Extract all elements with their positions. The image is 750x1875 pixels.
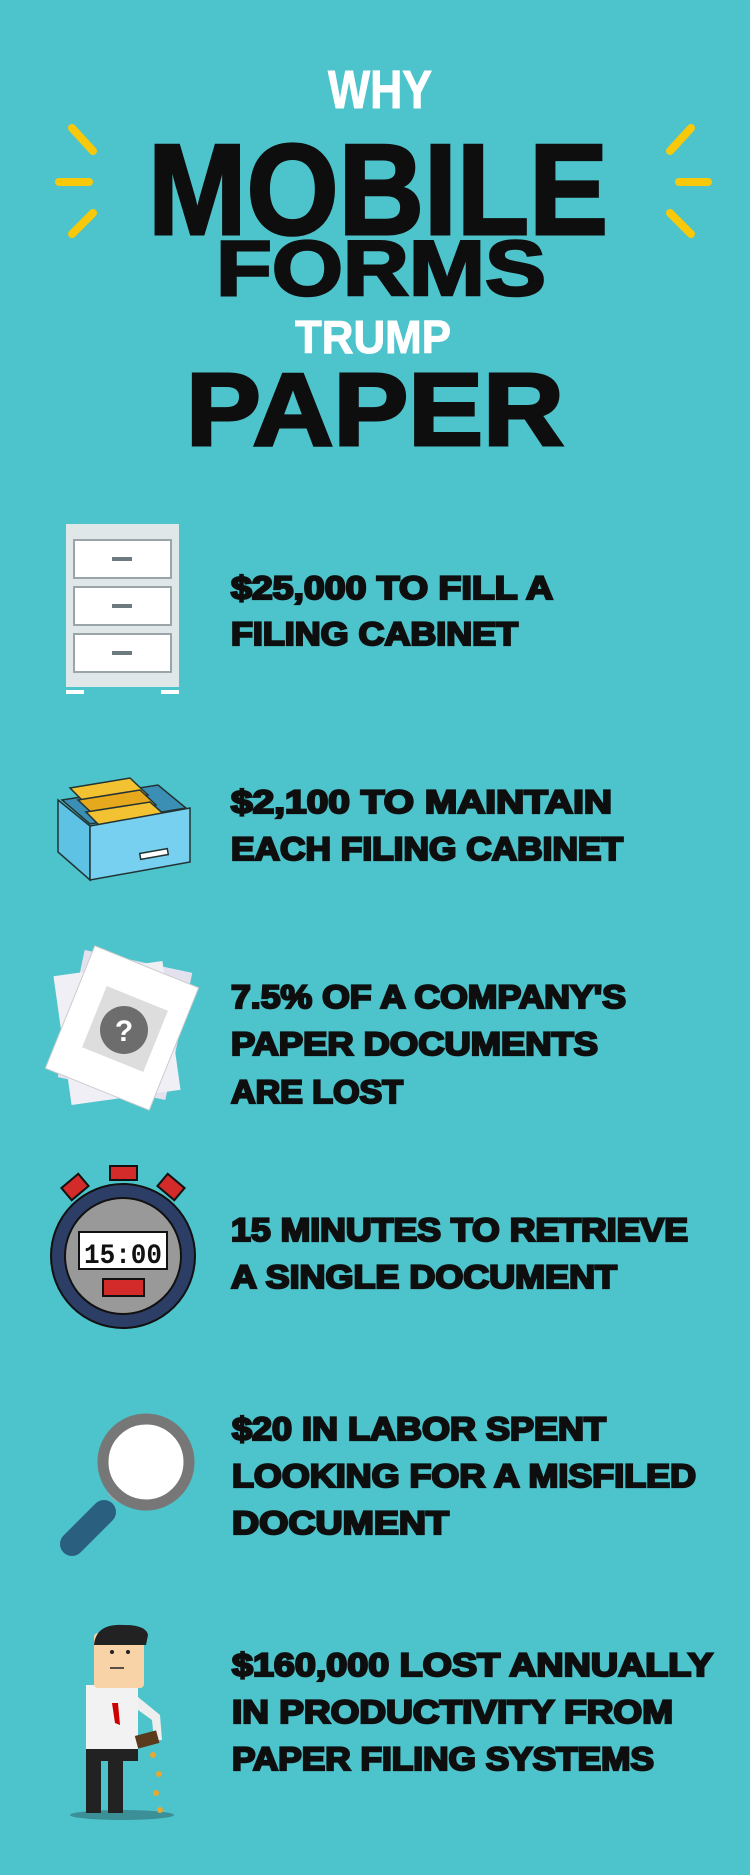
icon: stopwatch xyxy=(51,1166,195,1328)
text: retrieval time: 15 MINUTES TO RETRIEVE xyxy=(231,1212,688,1248)
text: filing cabinet cost: $25,000 TO FILL A xyxy=(231,570,553,606)
icon: yellow rays left xyxy=(59,128,93,234)
title: TRUMP xyxy=(295,311,451,363)
icon: stopwatch: 15:00 xyxy=(84,1241,162,1272)
text: lost documents xyxy=(231,979,626,1110)
text: maintain cost: $2,100 TO MAINTAIN xyxy=(231,784,612,820)
text: labor cost: LOOKING FOR A MISFILED xyxy=(232,1458,696,1494)
text: filing cabinet cost: FILING CABINET xyxy=(231,616,519,652)
text: labor cost xyxy=(232,1411,696,1541)
text: lost documents: PAPER DOCUMENTS xyxy=(231,1026,598,1062)
text: retrieval time: A SINGLE DOCUMENT xyxy=(231,1259,618,1295)
icon: filing cabinet xyxy=(66,524,179,694)
icon: lost papers xyxy=(45,946,199,1110)
icon: businessman with wallet xyxy=(70,1625,174,1820)
text: lost documents: ARE LOST xyxy=(231,1074,403,1110)
text: annual productivity loss: IN PRODUCTIVITY FROM xyxy=(232,1694,673,1730)
title: PAPER xyxy=(186,352,564,467)
text: annual productivity loss: PAPER FILING SYSTEMS xyxy=(232,1741,654,1777)
text: filing cabinet cost xyxy=(231,570,553,652)
icon: lost papers: ? xyxy=(115,1015,133,1048)
icon: magnifying glass xyxy=(72,1419,189,1544)
icon: yellow rays right xyxy=(670,128,708,234)
text: maintain cost xyxy=(231,784,623,867)
title xyxy=(148,60,608,467)
text: annual productivity loss: $160,000 LOST ANNUALLY xyxy=(232,1647,713,1683)
title: FORMS xyxy=(216,224,546,312)
title: WHY xyxy=(328,60,432,120)
text: labor cost: DOCUMENT xyxy=(232,1505,450,1541)
text: labor cost: $20 IN LABOR SPENT xyxy=(232,1411,607,1447)
text: retrieval time xyxy=(231,1212,688,1295)
title: MOBILE xyxy=(148,118,608,262)
text: maintain cost: EACH FILING CABINET xyxy=(231,831,623,867)
icon: card file box xyxy=(58,778,190,880)
text: lost documents: 7.5% OF A COMPANY'S xyxy=(231,979,626,1015)
text: annual productivity loss xyxy=(232,1647,713,1777)
